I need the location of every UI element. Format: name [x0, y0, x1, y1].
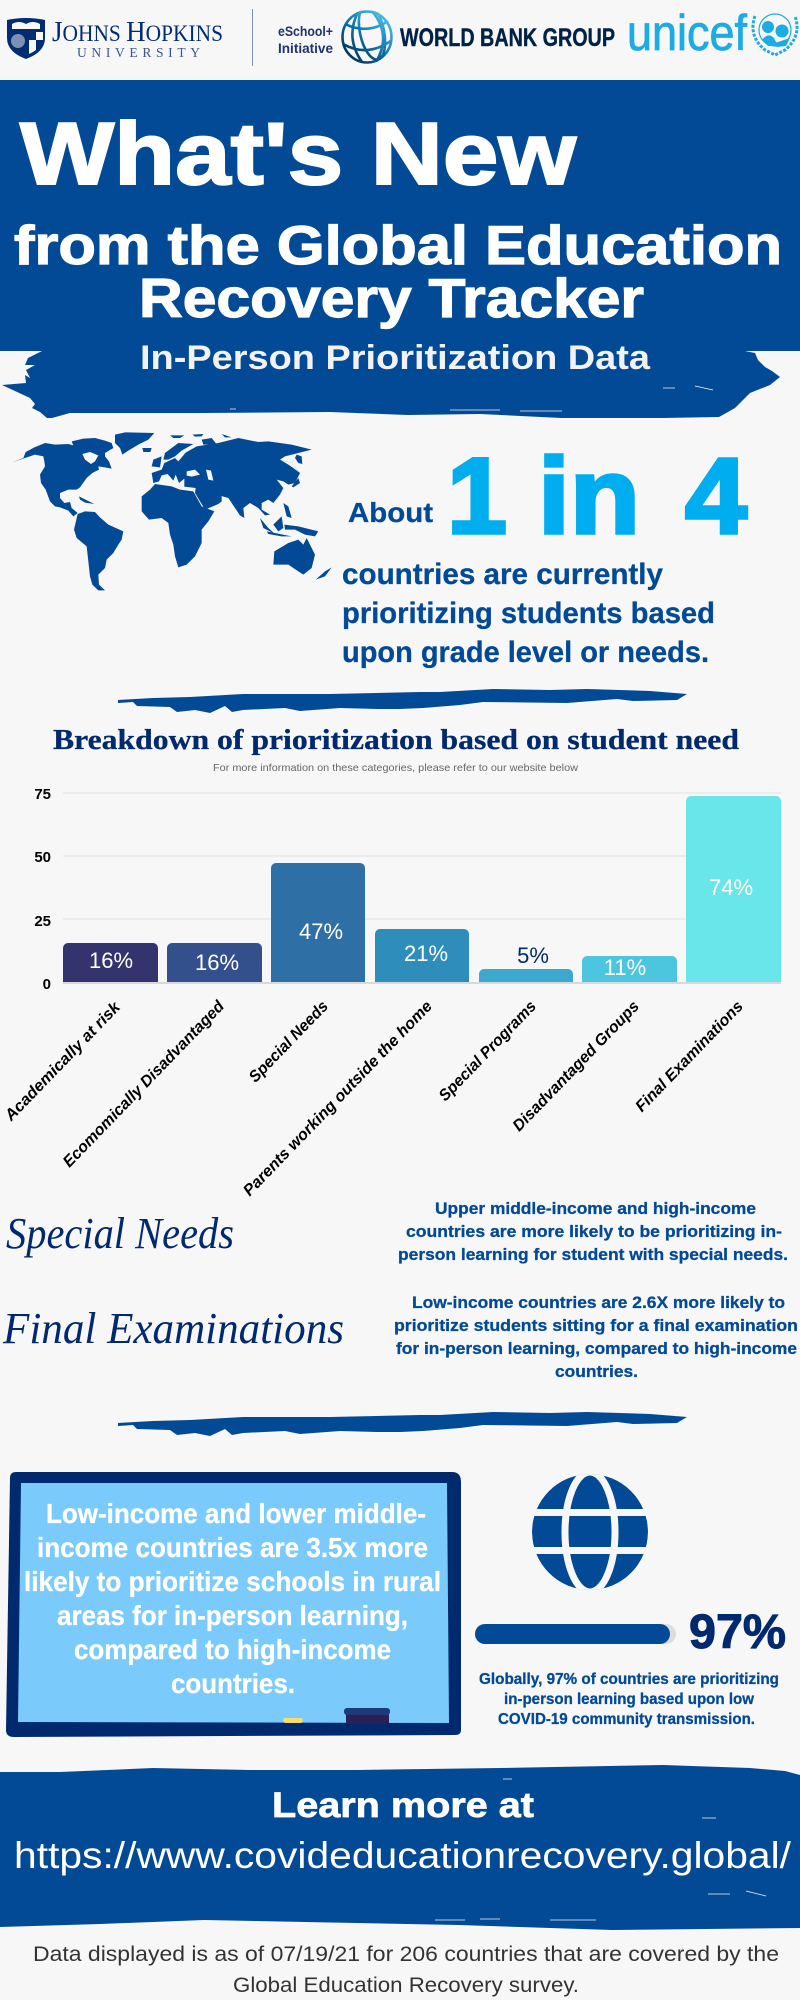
brush divider 1: [118, 689, 687, 713]
footnote: Data displayed is as of 07/19/21 for 206 countries that are covered by the: [33, 1943, 779, 1966]
bar: Parents working outside the home 21%: 21%: [404, 941, 448, 966]
chart subheading: For more information on these categories, please refer to our website below: [213, 762, 578, 774]
text: Final Examinations finding: Low-income countries are 2.6X more likely to: [412, 1293, 785, 1312]
logo: unicef: unicef: [627, 5, 747, 61]
bar: Final Examinations 74%: 74%: [709, 875, 753, 900]
bar: Disadvantaged Groups 11%: [582, 955, 677, 982]
chalk: [283, 1718, 303, 1723]
heading: Learn more at: Learn more at: [272, 1786, 534, 1825]
text: countries prioritizing: upon grade level or needs.: [342, 636, 709, 669]
bar: Parents working outside the home 21%: [375, 929, 469, 982]
footnote: Global Education Recovery survey.: [233, 1974, 579, 1997]
brush divider 2: [118, 1412, 687, 1436]
bar: Academically at risk 16%: [63, 943, 158, 982]
chalkboard text: countries.: [171, 1668, 295, 1699]
heading: Special Needs: Special Needs: [6, 1209, 234, 1258]
eraser: [344, 1708, 390, 1724]
icon: globe: [530, 1472, 650, 1592]
bar: Economically Disadvantaged 16%: 16%: [195, 950, 239, 975]
text: Special Needs finding: Upper middle-income and high-income: [435, 1199, 756, 1218]
text: Special Needs finding: [398, 1199, 788, 1264]
panel: chalkboard callout: [6, 1472, 461, 1737]
callout: About 1 in 4: in: [538, 435, 640, 556]
icon: world map: [12, 432, 332, 590]
link: website URL: https://www.covideducationrecovery.global/: [14, 1835, 792, 1876]
x axis category labels: Special Programs: [436, 998, 540, 1105]
chalkboard text: likely to prioritize schools in rural: [24, 1566, 441, 1597]
logo: Johns Hopkins University: JOHNS HOPKINS: [52, 16, 223, 48]
text: countries prioritizing: [342, 558, 715, 669]
banner brush specks: [435, 1779, 766, 1920]
subtitle: In-Person Prioritization Data: In-Person Prioritization Data: [140, 339, 651, 377]
y axis labels: 0: [43, 976, 51, 993]
text: Final Examinations finding: countries.: [555, 1362, 638, 1381]
bar: Economically Disadvantaged 16%: [167, 943, 262, 982]
x axis category labels: Academically at risk: [1, 998, 125, 1125]
banner brush specks: [230, 386, 713, 411]
logo: Johns Hopkins University: UNIVERSITY: [77, 45, 200, 60]
text: Final Examinations finding: prioritize students sitting for a final examination: [394, 1316, 798, 1335]
chalkboard text: [24, 1498, 441, 1699]
bar: Special Needs 47%: 47%: [299, 919, 343, 944]
x axis category labels: Final Examinations: [633, 998, 747, 1116]
title: What's New: What's New: [20, 104, 577, 203]
chalkboard text: Low-income and lower middle-: [46, 1498, 426, 1529]
callout: About 1 in 4: [348, 435, 747, 556]
x axis category labels: Special Needs: [246, 998, 332, 1086]
footnote: [33, 1943, 779, 1997]
text: Final Examinations finding: for in-person learning, compared to high-income: [396, 1339, 797, 1358]
footer banner: [0, 1765, 800, 1930]
stat: 97%: 97%: [689, 1606, 786, 1659]
x axis category labels: Ecomomically Disadvantaged: [60, 997, 229, 1171]
title banner: [0, 80, 800, 418]
text: globally 97% caption: [479, 1671, 779, 1728]
text: globally 97% caption: COVID-19 community transmission.: [498, 1711, 755, 1728]
text: globally 97% caption: Globally, 97% of countries are prioritizing: [479, 1671, 779, 1688]
text: Final Examinations finding: [394, 1293, 798, 1381]
callout: About 1 in 4: 1: [447, 435, 507, 556]
title: from the Global Education Recovery Tracker: Recovery Tracker: [139, 267, 644, 329]
y axis labels: 25: [34, 913, 51, 930]
text: countries prioritizing: countries are currently: [342, 558, 663, 591]
callout: About 1 in 4: About: [348, 497, 433, 528]
x axis category labels: Disadvantaged Groups: [510, 998, 643, 1135]
x axis category labels: [1, 997, 747, 1200]
chart heading: Breakdown of prioritization based on student need: [53, 724, 739, 756]
bar: Special Programs 5%: 5%: [517, 943, 549, 968]
logo: eSchool+ Initiative: eSchool+: [278, 24, 333, 39]
y axis labels: 75: [34, 786, 51, 803]
logo: World Bank Group: WORLD BANK GROUP: [400, 24, 615, 52]
logo: eSchool+ Initiative: Initiative: [278, 41, 333, 56]
text: globally 97% caption: in-person learning based upon low: [504, 1691, 755, 1708]
title: from the Global Education Recovery Tracker: [14, 214, 782, 329]
logo: World Bank Group: [341, 10, 614, 64]
y axis labels: [34, 786, 51, 993]
bar: Special Programs 5%: [479, 943, 573, 982]
chalkboard text: income countries are 3.5x more: [37, 1532, 428, 1563]
chalkboard text: compared to high-income: [74, 1634, 391, 1665]
text: Special Needs finding: countries are more likely to be prioritizing in-: [406, 1222, 782, 1241]
bar: Academically at risk 16%: 16%: [89, 948, 133, 973]
callout: About 1 in 4: 4: [685, 435, 747, 556]
logo: eSchool+ Initiative: [278, 24, 333, 56]
logo: Johns Hopkins University: [7, 16, 223, 60]
heading: Final Examinations: Final Examinations: [2, 1304, 344, 1353]
bar: Disadvantaged Groups 11%: 11%: [604, 955, 646, 980]
title: from the Global Education Recovery Tracker: from the Global Education: [14, 214, 782, 276]
y axis labels: 50: [34, 849, 51, 866]
divider between logos: [252, 9, 253, 66]
text: Special Needs finding: person learning for student with special needs.: [398, 1245, 788, 1264]
bar: Final Examinations 74%: [686, 796, 781, 982]
text: countries prioritizing: prioritizing students based: [342, 597, 715, 630]
chalkboard text: areas for in-person learning,: [57, 1600, 408, 1631]
bar chart: [1, 786, 781, 1200]
x axis category labels: Parents working outside the home: [240, 998, 436, 1200]
bar: Special Needs 47%: [271, 863, 365, 982]
progress bar 97%: [475, 1624, 676, 1644]
